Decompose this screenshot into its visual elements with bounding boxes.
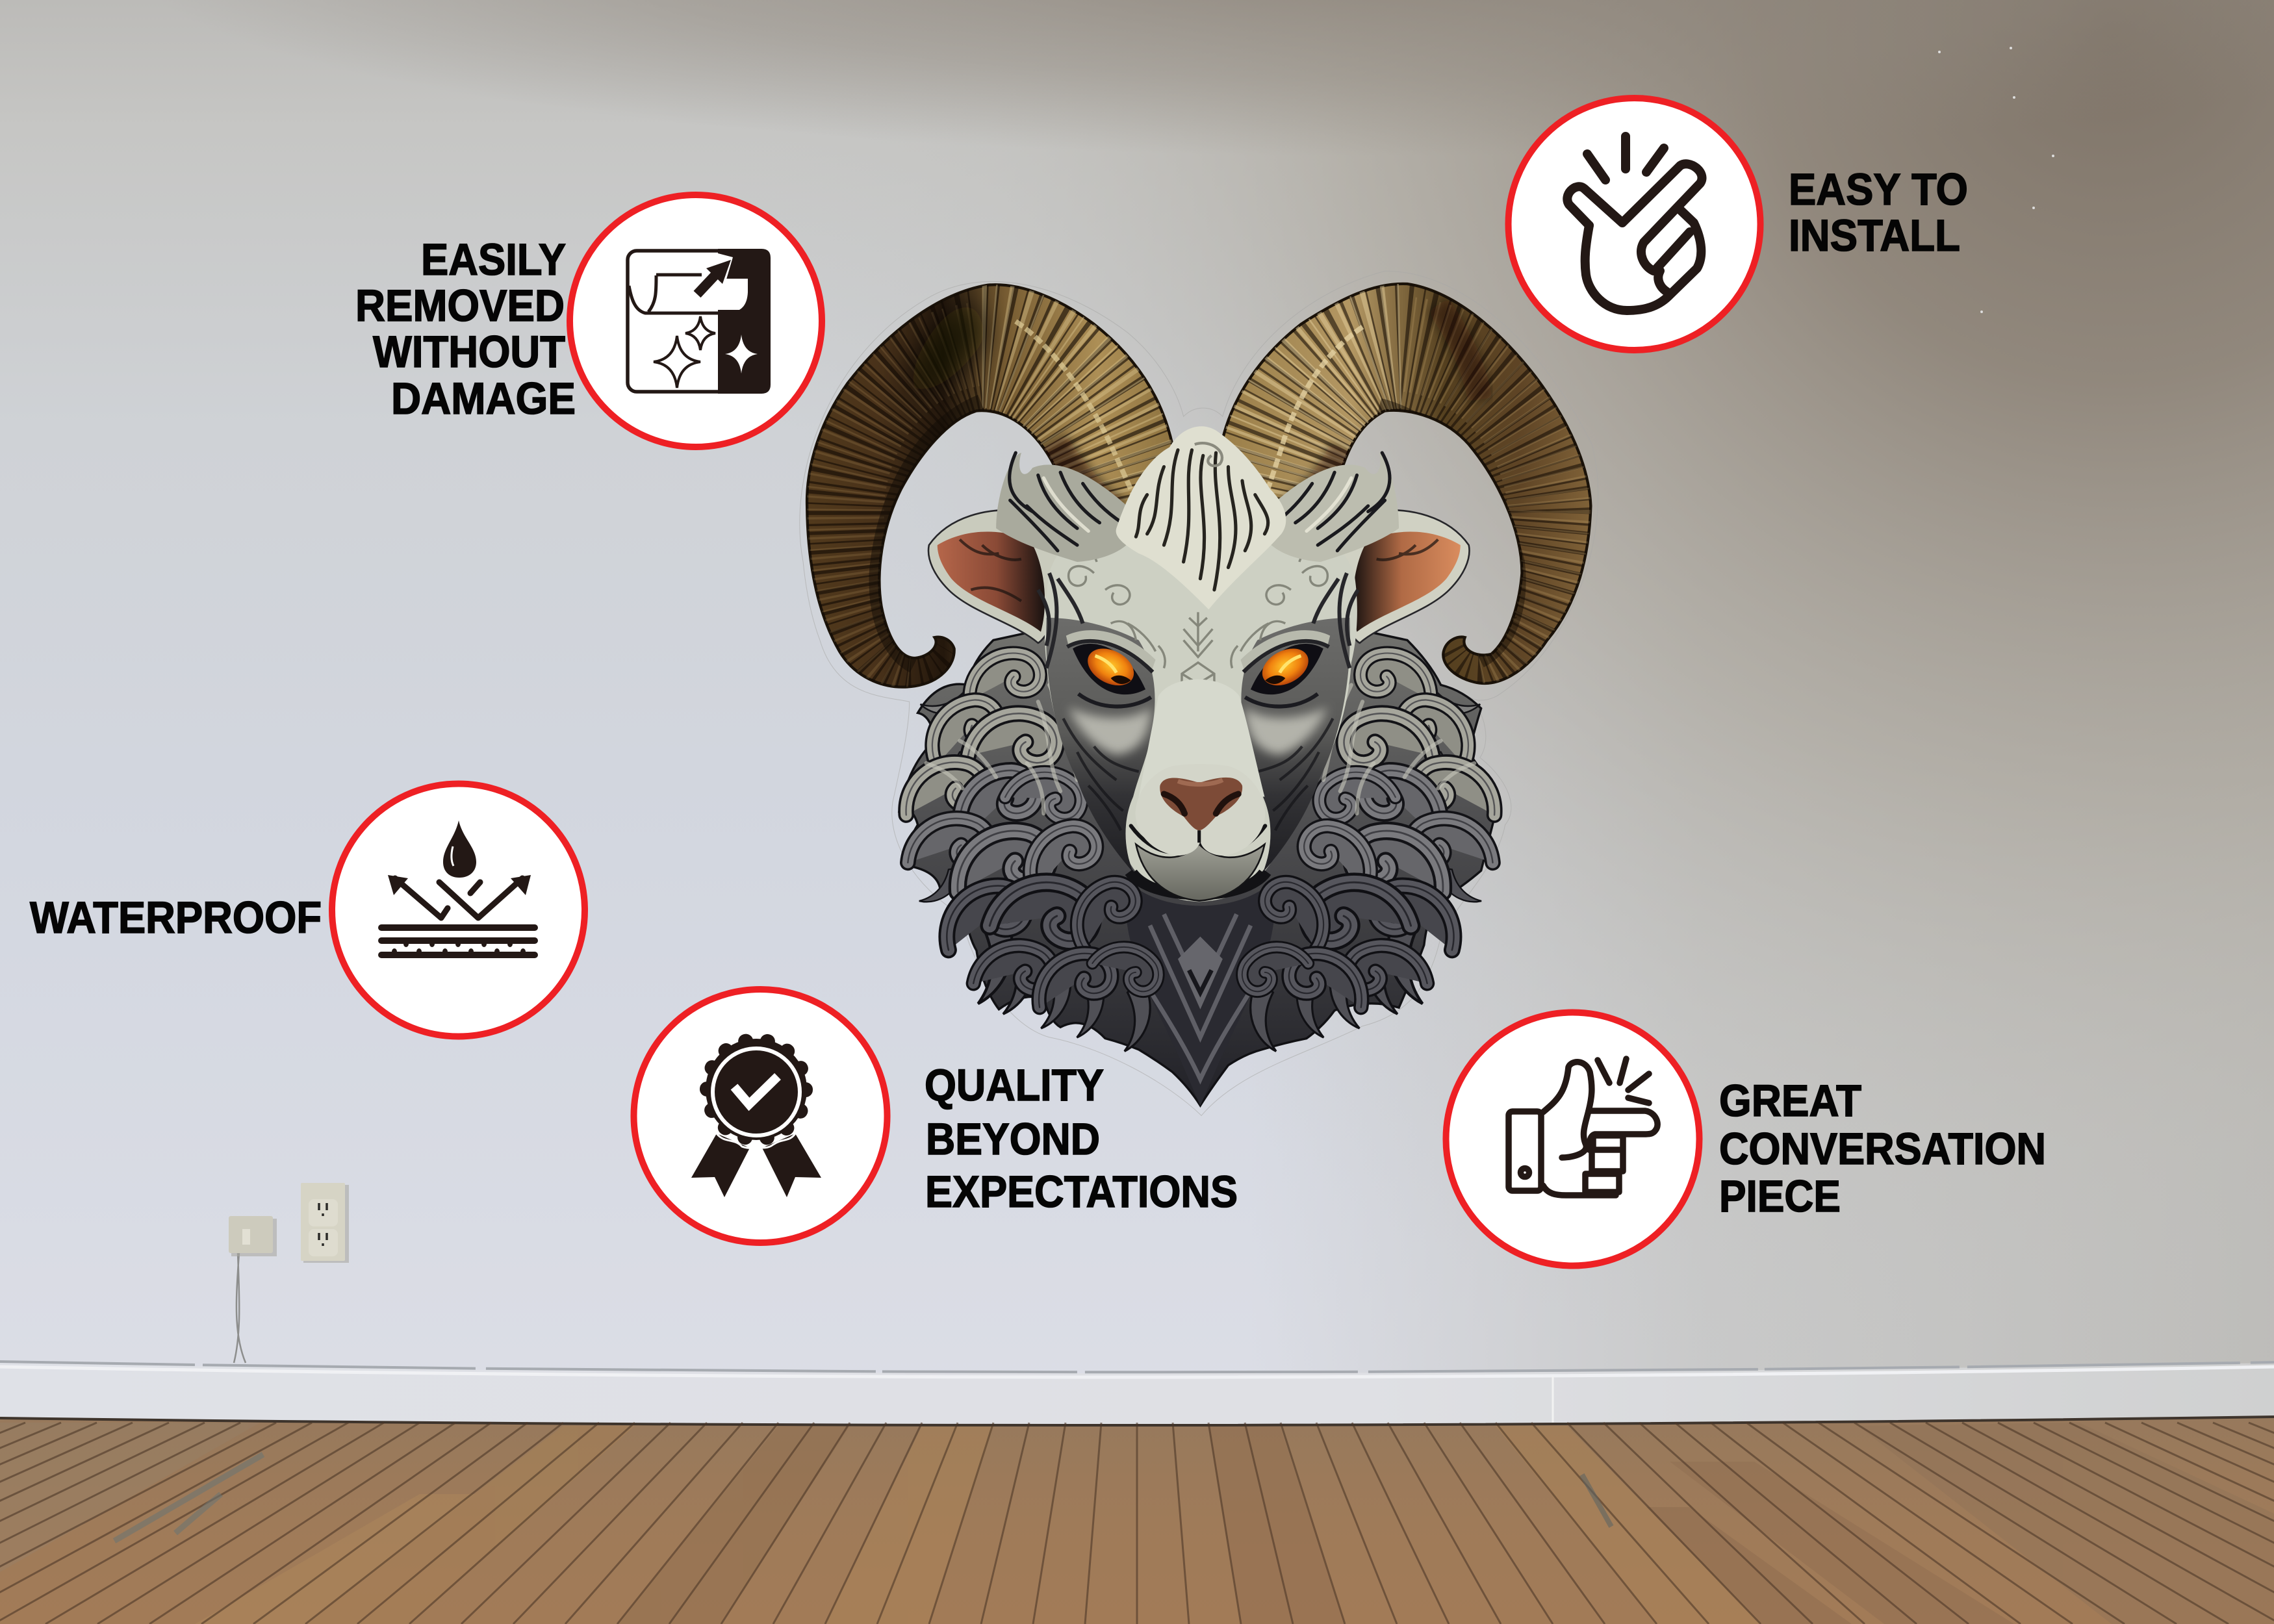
icon: water drop on layers — [378, 820, 538, 958]
wood floor — [0, 1417, 2274, 1624]
face — [1038, 500, 1358, 902]
feature: easy to install — [1509, 98, 1968, 350]
muzzle — [1136, 679, 1265, 901]
label: WITHOUT — [373, 327, 565, 377]
label: CONVERSATION — [1719, 1124, 2046, 1174]
left horn — [807, 285, 1172, 687]
label: BEYOND — [926, 1114, 1100, 1164]
beard — [1125, 881, 1275, 1106]
mane — [899, 596, 1498, 1106]
feature: quality beyond expectations — [634, 989, 1238, 1243]
label: REMOVED — [355, 281, 565, 331]
label: INSTALL — [1789, 210, 1960, 260]
sticker cut outline — [800, 271, 1598, 1115]
circle badge — [1509, 98, 1761, 350]
label: WATERPROOF — [30, 893, 322, 943]
icon: pointing hand — [1509, 1059, 1657, 1195]
label: EXPECTATIONS — [925, 1167, 1238, 1217]
circle badge — [634, 989, 888, 1243]
top hair tuft — [1116, 426, 1286, 609]
feature: easily removed without damage — [355, 195, 822, 447]
label: GREAT — [1719, 1076, 1861, 1126]
wall outlet — [301, 1183, 349, 1263]
circle badge — [570, 195, 822, 447]
forehead runes — [1182, 612, 1214, 741]
left ear — [928, 510, 1063, 643]
icon: peeling sticker — [628, 249, 771, 394]
label: DAMAGE — [391, 374, 576, 424]
upper hair sides — [996, 453, 1399, 562]
icon: finger snap hand — [1567, 136, 1702, 311]
nose — [1160, 778, 1242, 843]
label: PIECE — [1719, 1171, 1841, 1221]
label — [1719, 1076, 2046, 1221]
circle badge — [332, 783, 585, 1037]
label — [925, 1060, 1238, 1217]
label — [1789, 164, 1968, 260]
circle badge — [1446, 1012, 1700, 1265]
wall switch plate and wire — [229, 1216, 277, 1363]
ram head artwork — [800, 271, 1598, 1115]
feature: great conversation piece — [1446, 1012, 2046, 1265]
right horn — [1223, 284, 1591, 683]
label: EASY TO — [1789, 164, 1968, 214]
label — [355, 235, 576, 424]
icon: award rosette with check — [691, 1039, 821, 1197]
feature: waterproof — [30, 783, 585, 1037]
baseboard — [0, 1362, 2274, 1427]
right ear — [1335, 510, 1470, 643]
label: EASILY — [421, 235, 566, 285]
label: QUALITY — [925, 1060, 1104, 1110]
